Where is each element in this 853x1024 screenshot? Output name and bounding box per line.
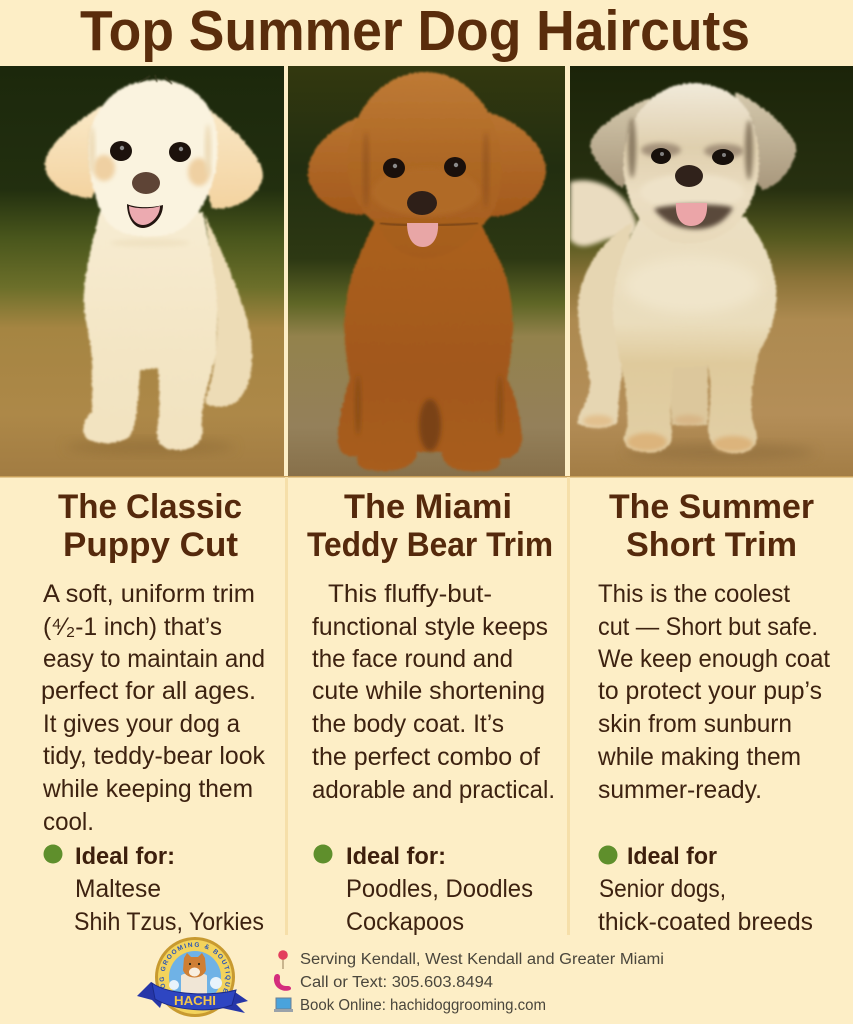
ideal for list: Poodles, Doodles	[346, 875, 533, 903]
panel: The Classic Puppy Cut	[0, 66, 284, 936]
description text: tidy, teddy-bear look	[43, 742, 265, 770]
ideal for list: Senior dogs,	[599, 875, 726, 903]
icon: green bullet	[598, 846, 618, 864]
heading	[307, 488, 553, 564]
ideal for list	[314, 843, 533, 936]
footer logo	[137, 937, 248, 1017]
heading	[609, 488, 814, 564]
icon: map pin	[278, 950, 288, 969]
title: Top Summer Dog Haircuts	[80, 0, 750, 63]
description text: (⁴⁄₂-1 inch) that’s	[43, 613, 222, 641]
icon: shiba dog in logo	[169, 953, 222, 996]
description text: while making them	[597, 743, 801, 771]
heading: Puppy Cut	[63, 526, 238, 564]
icon: green bullet	[314, 844, 332, 864]
description text: A soft, uniform trim	[43, 580, 255, 608]
description text: cute while shortening	[312, 677, 545, 705]
contact details: Call or Text: 305.603.8494	[300, 974, 493, 991]
panel: The Miami Teddy Bear Trim	[288, 66, 565, 936]
description text: perfect for all ages.	[41, 677, 256, 705]
ideal for list	[598, 843, 813, 936]
description text: the body coat. It’s	[312, 710, 504, 738]
ideal for list: Ideal for	[627, 843, 717, 870]
contact details: Serving Kendall, West Kendall and Greater Miami	[300, 951, 664, 968]
photo: red teddy-bear-cut dog	[288, 66, 565, 476]
heading	[58, 488, 242, 564]
ideal for list: Ideal for:	[346, 843, 446, 870]
description text: while keeping them	[42, 775, 253, 803]
ideal for list	[44, 843, 264, 936]
heading: Short Trim	[626, 526, 797, 564]
contact details	[274, 950, 664, 1014]
photo: white puppy-cut dog	[0, 66, 284, 476]
ideal for list: thick-coated breeds	[598, 908, 813, 936]
description text: cut — Short but safe.	[598, 613, 818, 641]
heading: The Classic	[58, 488, 242, 526]
ribbon: HACHI	[174, 993, 216, 1008]
description text: We keep enough coat	[598, 645, 830, 673]
footer logo: DOG GROOMING & BOUTIQUE	[160, 942, 230, 992]
ideal for list: Maltese	[75, 875, 161, 903]
description text: easy to maintain and	[43, 645, 265, 673]
description text: summer-ready.	[598, 776, 762, 804]
ideal for list: Cockapoos	[346, 908, 464, 936]
description text: the face round and	[312, 645, 513, 673]
description text: This fluffy-but-	[328, 580, 492, 608]
description text: skin from sunburn	[598, 710, 792, 738]
description text	[597, 580, 830, 804]
heading: The Miami	[344, 488, 512, 526]
ideal for list: Ideal for:	[75, 843, 175, 870]
description text: It gives your dog a	[43, 710, 240, 738]
icon: phone	[274, 974, 291, 991]
description text: cool.	[43, 808, 94, 836]
description text: This is the coolest	[598, 580, 790, 608]
contact details: Book Online: hachidoggrooming.com	[300, 997, 546, 1014]
panel: The Summer Short Trim	[570, 66, 853, 936]
icon: green bullet	[44, 844, 62, 864]
photo: shih tzu with short trim	[570, 66, 853, 476]
description text	[41, 580, 265, 836]
description text: functional style keeps	[312, 613, 548, 641]
description text: to protect your pup’s	[598, 677, 822, 705]
description text: the perfect combo of	[312, 743, 540, 771]
description text: adorable and practical.	[312, 776, 555, 804]
heading: The Summer	[609, 488, 814, 526]
heading: Teddy Bear Trim	[307, 526, 553, 564]
icon: laptop	[274, 998, 293, 1012]
description text	[312, 580, 555, 804]
ideal for list: Shih Tzus, Yorkies	[74, 908, 264, 936]
